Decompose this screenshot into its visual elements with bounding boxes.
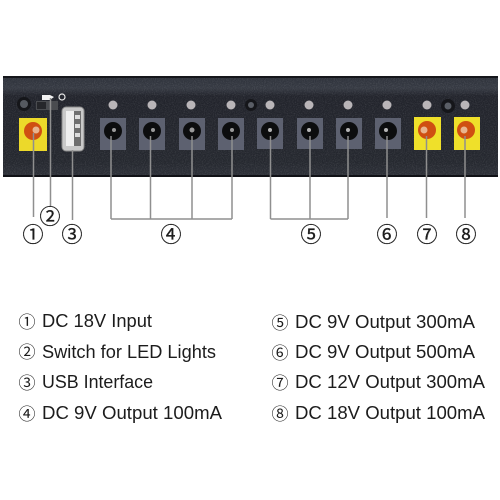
legend: left column: ② — [18, 338, 36, 363]
legend: right column: ⑧ — [272, 400, 288, 425]
callout numbers: ① — [22, 219, 44, 249]
legend: right column — [272, 309, 485, 425]
legend: right column: DC 9V Output 500mA — [295, 342, 475, 362]
input jack 1 — [19, 118, 47, 151]
barrel jack group 4 — [100, 118, 244, 150]
legend: left column: DC 18V Input — [42, 311, 152, 331]
callout numbers: ⑥ — [376, 219, 398, 249]
callout numbers: ④ — [160, 219, 182, 249]
legend: right column: ⑦ — [272, 369, 288, 394]
legend: left column: ③ — [18, 369, 36, 394]
callout numbers: ⑦ — [416, 219, 438, 249]
icon: LED switch — [36, 95, 58, 110]
panel: power supply front face — [3, 76, 498, 177]
legend: right column: DC 12V Output 300mA — [295, 372, 485, 392]
output jacks 7 and 8 — [414, 117, 480, 150]
callout lines — [34, 98, 465, 220]
legend: left column: DC 9V Output 100mA — [42, 403, 222, 423]
legend: left column: Switch for LED Lights — [42, 342, 216, 362]
LED indicators — [108, 100, 470, 110]
legend: left column: ① — [18, 308, 36, 333]
callout numbers: ⑤ — [300, 219, 322, 249]
legend: right column: DC 18V Output 100mA — [295, 403, 485, 423]
callout numbers: ⑧ — [456, 219, 476, 249]
icon: USB port — [62, 107, 84, 151]
barrel jack group 5 and 6 — [257, 118, 401, 149]
legend: right column: DC 9V Output 300mA — [295, 312, 475, 332]
legend: left column: USB Interface — [42, 372, 153, 392]
legend: right column: ⑥ — [272, 339, 288, 364]
callout numbers — [22, 201, 476, 249]
icon: light bulb — [59, 94, 65, 100]
callout numbers: ③ — [62, 219, 82, 249]
callout numbers: ② — [40, 201, 60, 231]
screws center and right — [245, 99, 455, 113]
legend: left column: ④ — [18, 400, 36, 425]
legend: right column: ⑤ — [272, 309, 288, 334]
icon: screw left — [17, 97, 31, 111]
legend: left column — [18, 308, 222, 425]
